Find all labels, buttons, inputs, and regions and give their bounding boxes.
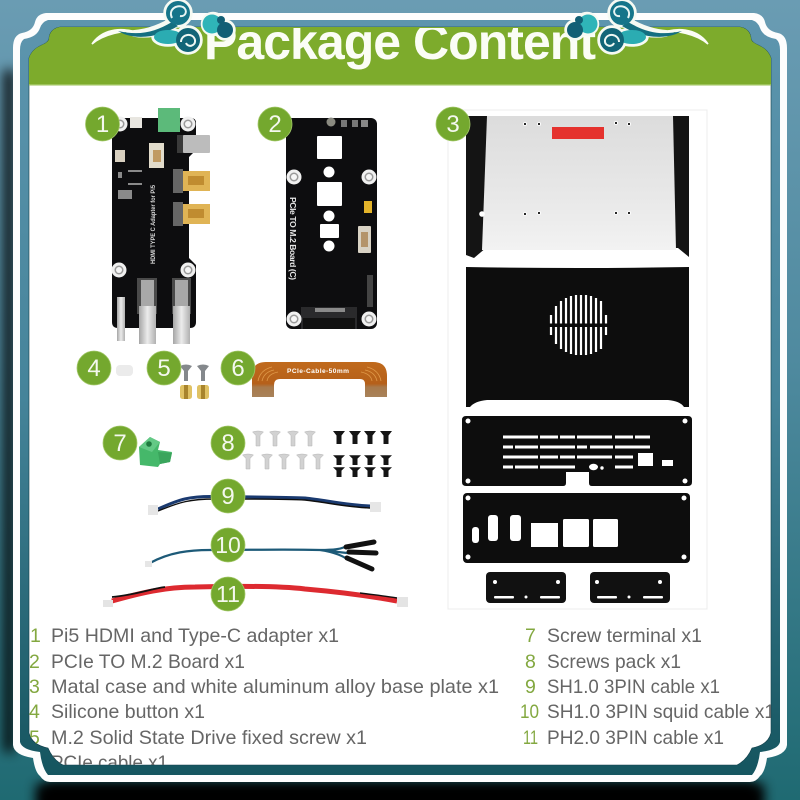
item 6: PCIe flex cable — [252, 362, 387, 397]
number badges: 9 — [221, 483, 235, 510]
icon: left cloud ornament — [92, 0, 234, 53]
item 4: silicone button — [116, 365, 133, 376]
parts list: Screws pack x1 — [547, 651, 681, 673]
parts list: 10 — [520, 701, 539, 723]
item 10: SH1.0 3PIN squid cable — [145, 542, 376, 569]
number badges: 8 — [221, 430, 235, 457]
item 6: PCIe flex cable: PCIe-Cable-50mm — [287, 368, 349, 375]
parts list: SH1.0 3PIN cable x1 — [547, 676, 720, 698]
item 5: SSD fixing screws and standoffs — [180, 364, 209, 399]
mounting brackets — [486, 572, 670, 603]
parts list: Screw terminal x1 — [547, 625, 702, 647]
parts list: Matal case and white aluminum alloy base plate x1 — [51, 676, 499, 698]
parts list: PCIe cable x1 — [51, 752, 168, 774]
number badges — [77, 107, 470, 611]
rear plate — [463, 493, 690, 563]
parts list: Silicone button x1 — [51, 701, 205, 723]
parts list — [29, 625, 775, 774]
number badges: 6 — [231, 355, 245, 382]
item 3: metal case and base plate — [448, 110, 707, 609]
number badges: 4 — [87, 355, 101, 382]
parts list: Pi5 HDMI and Type-C adapter x1 — [51, 625, 339, 647]
icon: right cloud ornament — [566, 0, 708, 53]
number badges: 5 — [157, 355, 171, 382]
parts list: 1 — [30, 625, 41, 647]
parts list: SH1.0 3PIN squid cable x1 — [547, 701, 775, 723]
item 1: HDMI and Type-C adapter board: HDMI TYPE C Adapter for Pi5 — [150, 185, 157, 264]
number badges: 7 — [113, 430, 127, 457]
item 11: PH2.0 3PIN cable — [103, 586, 408, 607]
fan grille — [551, 295, 606, 355]
front plate — [462, 416, 692, 486]
parts list: 7 — [525, 625, 536, 647]
item 2: PCIe to M.2 board: PCIe TO M.2 Board (C) — [288, 197, 298, 280]
parts list: M.2 Solid State Drive fixed screw x1 — [51, 727, 367, 749]
parts list: PCIe TO M.2 Board x1 — [51, 651, 245, 673]
item 2: PCIe to M.2 board — [286, 118, 377, 329]
parts list: 5 — [29, 727, 40, 749]
item 8: screws pack — [242, 431, 392, 477]
parts list: PH2.0 3PIN cable x1 — [547, 727, 724, 749]
parts list: 3 — [29, 676, 40, 698]
title: Package Content — [204, 14, 596, 70]
item 7: green screw terminal — [139, 437, 172, 467]
parts list: 9 — [525, 676, 536, 698]
parts list: 8 — [525, 651, 536, 673]
parts list: 4 — [29, 701, 40, 723]
parts list: 2 — [29, 651, 40, 673]
parts list: 11 — [523, 727, 538, 749]
number badges: 2 — [268, 111, 282, 138]
number badges: 1 — [96, 111, 109, 138]
number badges: 3 — [446, 111, 460, 138]
number badges: 10 — [215, 532, 241, 558]
item 9: SH1.0 3PIN cable — [148, 496, 381, 515]
number badges: 11 — [216, 581, 240, 607]
item 1: HDMI and Type-C adapter board — [112, 108, 210, 344]
